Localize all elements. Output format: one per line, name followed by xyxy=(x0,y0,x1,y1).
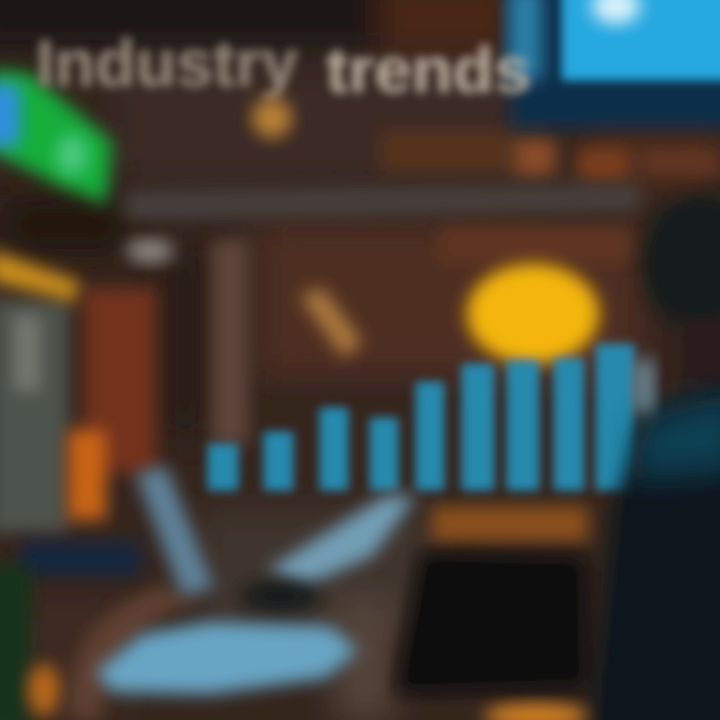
bar chart xyxy=(208,344,634,490)
dark navy ledge xyxy=(20,542,140,576)
monitor top right xyxy=(508,0,720,128)
heading xyxy=(36,26,531,106)
person silhouette xyxy=(590,194,720,720)
dark keyboard shadow xyxy=(240,580,320,612)
green tablet top left xyxy=(0,70,112,204)
yellow awning xyxy=(0,250,80,302)
wooden post xyxy=(212,240,248,445)
heading: trends xyxy=(326,34,531,106)
orange glow spot xyxy=(252,98,292,138)
sun xyxy=(467,264,599,364)
bottom left orange xyxy=(28,664,60,716)
heading: Industry xyxy=(36,26,298,100)
grey beam xyxy=(125,184,640,220)
green plant xyxy=(0,565,31,720)
bottom orange glow xyxy=(484,704,588,720)
desk curve xyxy=(70,585,200,720)
light blue papers xyxy=(96,466,416,694)
orange tag xyxy=(300,288,362,358)
brick band xyxy=(380,130,720,262)
laptop xyxy=(394,552,588,694)
orange desk band xyxy=(432,506,588,542)
brick column xyxy=(68,288,156,520)
left window xyxy=(0,300,68,532)
white light spot xyxy=(126,239,174,263)
